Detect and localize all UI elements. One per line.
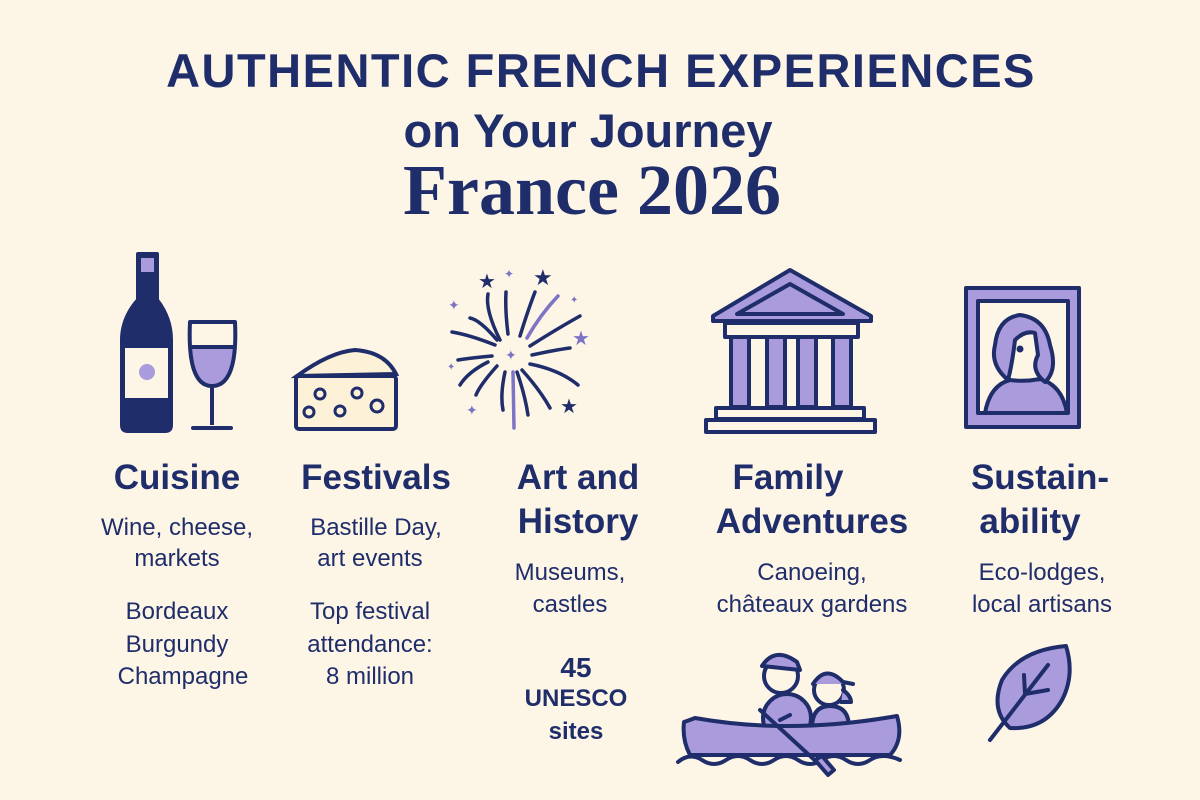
- icon: cheese: [296, 350, 396, 429]
- icon: temple: [706, 270, 875, 432]
- column: cuisine: Wine, cheese,: [101, 514, 253, 541]
- column: art and history: UNESCO: [525, 685, 627, 712]
- column: cuisine: Burgundy: [126, 631, 228, 658]
- icon: fireworks: [447, 265, 590, 428]
- icon: fireworks: ✦: [466, 404, 478, 419]
- column: art and history: History: [518, 502, 639, 541]
- column: cuisine: Cuisine: [114, 458, 240, 497]
- icon: fireworks: ✦: [505, 349, 517, 364]
- column: festivals: 8 million: [326, 663, 414, 690]
- column: family adventures: [716, 458, 908, 618]
- column: festivals: Bastille Day,: [310, 514, 442, 541]
- column: cuisine: Bordeaux: [126, 598, 228, 625]
- icon: fireworks: ✦: [448, 299, 460, 314]
- column: festivals: art events: [317, 545, 423, 572]
- icon: fireworks: ✦: [504, 267, 514, 281]
- column: cuisine: Champagne: [118, 663, 248, 690]
- title: on Your Journey: [403, 104, 773, 157]
- icon: fireworks: ✦: [447, 362, 455, 373]
- title: [166, 44, 1036, 230]
- icon: leaf: [990, 646, 1070, 740]
- column: family adventures: Canoeing,: [757, 559, 867, 586]
- column: sustainability: ability: [979, 502, 1081, 541]
- icon: canoe: [678, 655, 900, 775]
- title: France 2026: [403, 150, 781, 230]
- column: sustainability: [971, 458, 1112, 618]
- icon: fireworks: ✦: [570, 295, 578, 306]
- column: cuisine: [101, 458, 253, 690]
- column: family adventures: châteaux gardens: [717, 591, 907, 618]
- column: art and history: [515, 458, 639, 745]
- column: festivals: attendance:: [307, 631, 433, 658]
- column: festivals: [301, 458, 451, 690]
- column: art and history: sites: [549, 718, 603, 745]
- column: sustainability: local artisans: [972, 591, 1112, 618]
- column: family adventures: Family: [733, 458, 844, 497]
- column: art and history: castles: [533, 591, 607, 618]
- column: sustainability: Eco-lodges,: [979, 559, 1105, 586]
- title: AUTHENTIC FRENCH EXPERIENCES: [166, 44, 1036, 97]
- column: cuisine: markets: [134, 545, 220, 572]
- icon: fireworks: ★: [533, 265, 553, 290]
- column: family adventures: Adventures: [716, 502, 908, 541]
- column: art and history: Art and: [517, 458, 639, 497]
- icon: fireworks: ★: [560, 396, 578, 418]
- icon: portrait: [966, 288, 1079, 427]
- column: art and history: 45: [560, 652, 592, 683]
- icon: fireworks: ★: [478, 271, 496, 293]
- column: festivals: Festivals: [301, 458, 451, 497]
- column: sustainability: Sustain-: [971, 458, 1109, 497]
- icon: wine bottle and glass: [122, 254, 235, 431]
- column: art and history: Museums,: [515, 559, 625, 586]
- column: festivals: Top festival: [310, 598, 430, 625]
- icon: fireworks: ★: [572, 328, 590, 350]
